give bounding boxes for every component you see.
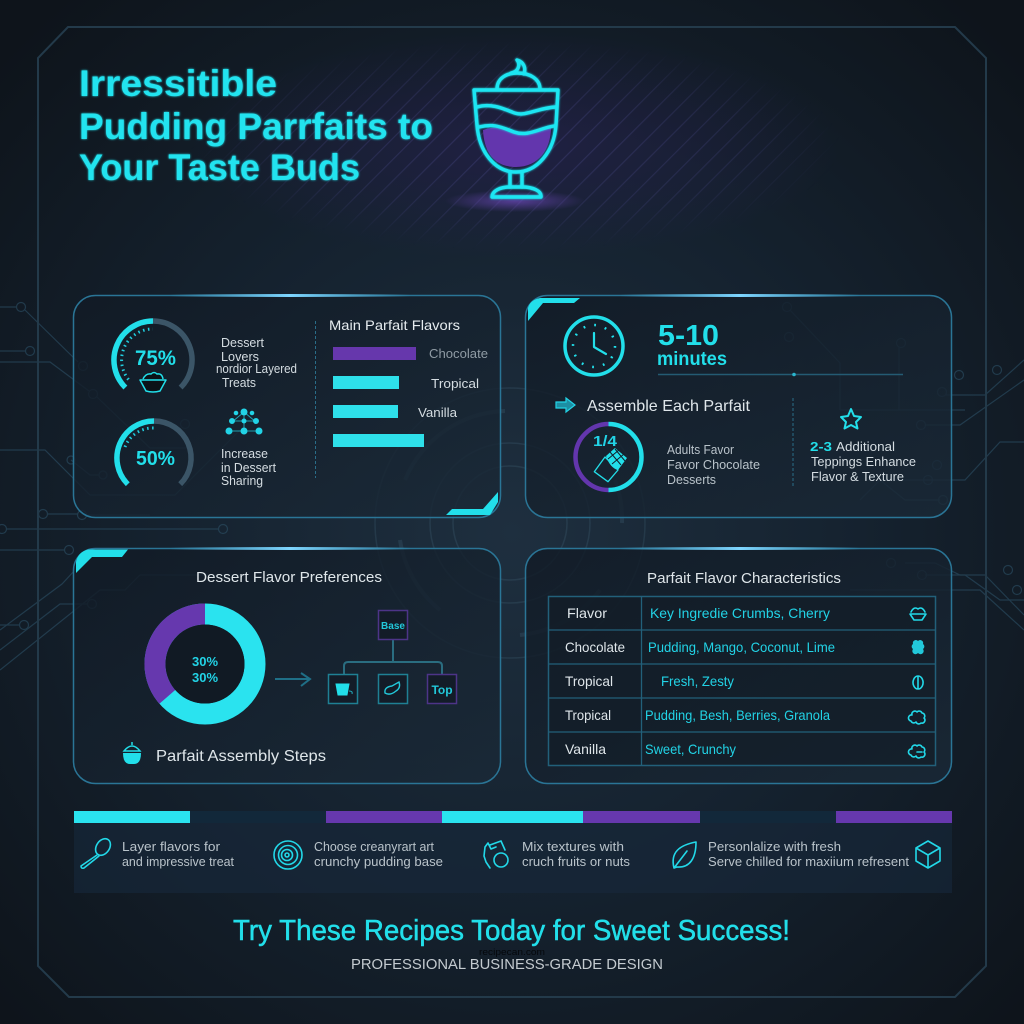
text: additional toppings: Teppings Enhance bbox=[811, 455, 916, 469]
icon: cube bbox=[916, 841, 940, 868]
panel: assembly time bbox=[526, 294, 952, 518]
icon: leaf bbox=[673, 842, 696, 868]
icon: bowl bbox=[123, 742, 141, 764]
tip: mix textures: Mix textures with bbox=[522, 840, 624, 854]
table: Vanilla bbox=[565, 741, 606, 757]
table: Tropical bbox=[565, 673, 613, 689]
table: Fresh, Zesty bbox=[661, 673, 734, 689]
table: Pudding, Besh, Berries, Granola bbox=[645, 707, 830, 723]
text: increase in sharing: Sharing bbox=[221, 474, 263, 488]
stat: 5-10 minutes bbox=[657, 320, 727, 370]
tip: choose base: Choose creanyrart art bbox=[314, 840, 435, 854]
text: dessert lovers: Treats bbox=[222, 376, 256, 390]
bar chart: main parfait flavors: Vanilla bbox=[418, 406, 457, 420]
label: parfait assembly steps: Parfait Assembly Steps bbox=[156, 748, 326, 765]
icon: crumble bbox=[484, 841, 508, 868]
text: dessert lovers bbox=[216, 336, 297, 390]
text: dessert lovers: nordior Layered bbox=[216, 362, 297, 376]
panel: audience stats and flavors bbox=[74, 294, 500, 518]
heading: Dessert Flavor Preferences bbox=[196, 569, 382, 586]
table: Pudding, Mango, Coconut, Lime bbox=[648, 639, 835, 655]
text: dessert lovers: Lovers bbox=[221, 350, 259, 364]
arrow bbox=[275, 673, 310, 686]
subtitle: PROFESSIONAL BUSINESS-GRADE DESIGN bbox=[351, 956, 663, 973]
title bbox=[79, 63, 433, 188]
title: Your Taste Buds bbox=[79, 147, 360, 188]
tip: personalize: Personlalize with fresh bbox=[708, 840, 841, 854]
panel: flavor characteristics bbox=[526, 547, 952, 784]
text: additional toppings: Additional bbox=[836, 440, 895, 454]
tip: personalize: Serve chilled for maxiium refresent bbox=[708, 855, 910, 869]
text: increase in sharing: Increase bbox=[221, 447, 268, 461]
table: Chocolate bbox=[565, 639, 625, 655]
gauge: 50 percent: 50% bbox=[136, 448, 175, 470]
table: Flavor bbox=[567, 605, 607, 621]
watermark: recipecan.com bbox=[479, 947, 545, 957]
text: additional toppings: 2-3 bbox=[810, 439, 832, 454]
icon: parfait glass bbox=[445, 60, 585, 212]
tip: layer flavors bbox=[122, 840, 235, 869]
bar chart: main parfait flavors: Tropical bbox=[431, 377, 479, 391]
text: dessert lovers: Dessert bbox=[221, 336, 265, 350]
icon: spoon bbox=[81, 836, 113, 868]
text: adults favor bbox=[667, 443, 760, 487]
tip: layer flavors: and impressive treat bbox=[122, 855, 235, 869]
icon: star bbox=[841, 409, 861, 428]
table: Sweet, Crunchy bbox=[645, 741, 736, 757]
heading: assemble each parfait: Assemble Each Parfait bbox=[587, 398, 751, 415]
table bbox=[548, 596, 936, 766]
table: Key Ingredie Crumbs, Cherry bbox=[650, 605, 830, 621]
text: increase in sharing: in Dessert bbox=[221, 461, 277, 475]
bar chart: main parfait flavors bbox=[329, 317, 488, 447]
stat: 5-10 minutes: minutes bbox=[657, 349, 727, 370]
bar chart: main parfait flavors: Chocolate bbox=[429, 347, 488, 361]
icon: swirl bbox=[274, 841, 302, 869]
stat: 5-10 minutes: 5-10 bbox=[658, 320, 719, 352]
tip: choose base bbox=[314, 840, 443, 869]
text: adults favor: Favor Chocolate bbox=[667, 458, 760, 472]
panel: dessert flavor preferences bbox=[74, 547, 500, 784]
gauge: 75 percent: 75% bbox=[135, 347, 176, 370]
table: Tropical bbox=[565, 707, 611, 723]
tip: mix textures: cruch fruits or nuts bbox=[522, 855, 630, 869]
ring: one quarter: 1/4 bbox=[593, 433, 618, 450]
tip: layer flavors: Layer flavors for bbox=[122, 840, 220, 854]
band: tips strip bbox=[74, 811, 952, 893]
title: Pudding Parrfaits to bbox=[79, 106, 433, 147]
text: additional toppings: Flavor & Texture bbox=[811, 470, 904, 484]
donut chart: 30% bbox=[192, 654, 218, 669]
ring: one quarter bbox=[576, 424, 642, 490]
heading: Parfait Flavor Characteristics bbox=[647, 570, 841, 587]
bar chart: main parfait flavors: Main Parfait Flavors bbox=[329, 317, 460, 333]
text: adults favor: Adults Favor bbox=[667, 443, 734, 457]
icon: clock bbox=[565, 317, 623, 375]
icon: arrow bbox=[556, 398, 575, 412]
call to action: Try These Recipes Today for Sweet Success! bbox=[233, 915, 790, 947]
text: additional toppings bbox=[810, 439, 916, 484]
icon: sharing network bbox=[226, 409, 262, 434]
flow diagram: assembly bbox=[328, 610, 456, 704]
text: adults favor: Desserts bbox=[667, 473, 716, 487]
flow diagram: assembly: Base bbox=[381, 621, 405, 632]
tip: personalize bbox=[708, 840, 910, 869]
title: Irressitible bbox=[79, 63, 277, 104]
donut chart bbox=[155, 614, 255, 714]
gauge: 75 percent bbox=[114, 321, 192, 392]
text: increase in sharing bbox=[221, 447, 277, 488]
gauge: 50 percent bbox=[117, 421, 191, 484]
tip: choose base: crunchy pudding base bbox=[314, 855, 443, 869]
tip: mix textures bbox=[522, 840, 630, 869]
flow diagram: assembly: Top bbox=[431, 683, 453, 697]
donut chart: 30% bbox=[192, 670, 218, 685]
